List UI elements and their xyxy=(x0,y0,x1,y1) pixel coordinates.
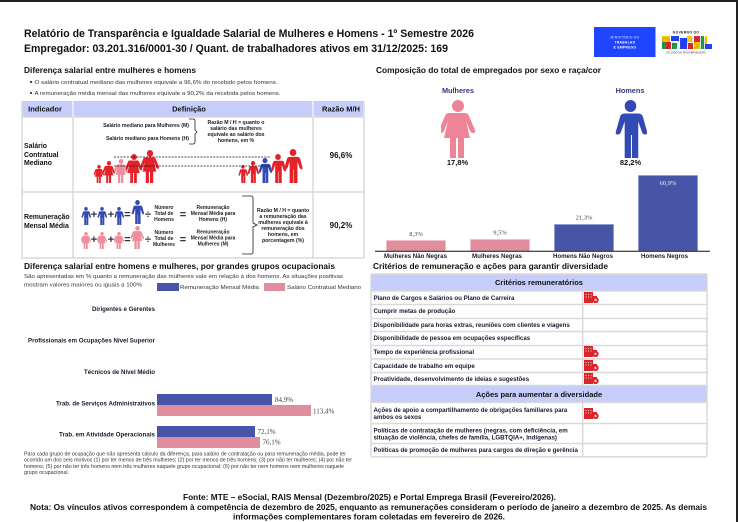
criteria labels xyxy=(374,295,570,383)
logo: Ministério do Trabalho e Emprego: E EMPREGO xyxy=(614,46,636,50)
formula text xyxy=(153,205,235,248)
bullet list: O salário contratual mediano das mulheres equivale a 96,6% do recebido pelos homens. xyxy=(34,80,278,86)
formula operators xyxy=(91,209,186,246)
ratio explanation: a remuneração das xyxy=(259,214,307,220)
footnote: Para cada grupo de ocupação que não apresenta cálculo da diferença, para salário de contratação ou para remuneração média, pode ter xyxy=(24,452,346,458)
heading: grupos ocupacionais: Diferença salarial entre homens e mulheres, por grandes grupos ocupacionais xyxy=(24,261,335,271)
bar values: 76,1% xyxy=(262,438,281,446)
formula text: Número xyxy=(155,230,173,236)
bar chart: sexo e raça xyxy=(375,176,710,260)
formula operators: + xyxy=(91,209,97,221)
actions labels: Ações de apoio a compartilhamento de obrigações familiares para xyxy=(374,407,568,414)
formula text: Remuneração xyxy=(196,205,230,211)
actions labels xyxy=(374,407,579,454)
bullet list xyxy=(30,80,281,97)
footnote: ocorrido um dos seis motivos:(1) por ter menos de três mulheres; (2) por ter menos de três homens; (3) por não ter mulheres; (4) por não ter xyxy=(24,458,352,464)
formula operators: ÷ xyxy=(145,234,151,246)
formula text: Remuneração xyxy=(196,230,230,236)
table header: Razão M/H xyxy=(322,104,360,114)
formula text: Mensal Média para xyxy=(191,236,235,242)
table header: Indicador xyxy=(28,104,62,114)
table header: Definição xyxy=(172,104,206,114)
intro text: São apresentadas em % quanto a remuneração das mulheres vale em relação à dos homens. As situações positivas xyxy=(24,274,343,280)
logo: Ministério do Trabalho e Emprego: TRABALHO xyxy=(615,40,636,44)
composition: homens xyxy=(616,86,647,167)
composition: mulheres: Mulheres xyxy=(442,86,474,95)
bar values: 21,3% xyxy=(576,214,593,222)
formula operators: + xyxy=(91,234,97,246)
row label: remuneração mensal média: Remuneração xyxy=(24,214,70,221)
row definition text: salário: salário das mulheres xyxy=(210,126,262,132)
bar values: 72,1% xyxy=(258,428,276,436)
formula text: Homens (H) xyxy=(199,217,227,223)
ratio explanation xyxy=(257,208,309,244)
row label: salário contratual mediano xyxy=(24,143,59,167)
logo: Ministério do Trabalho e Emprego xyxy=(594,27,656,57)
bar categories: Mulheres Negras xyxy=(472,254,523,260)
row label: remuneração mensal média xyxy=(24,214,70,230)
section header: critérios remuneratórios: Critérios remuneratórios xyxy=(495,278,583,287)
legend xyxy=(157,283,361,291)
logo: Governo do Brasil xyxy=(661,30,712,54)
row label: salário contratual mediano: Salário xyxy=(24,143,47,150)
actions labels: situação de violência, chefes de família, LGBTQIA+, Indígenas) xyxy=(374,434,557,442)
criteria labels: Cumprir metas de produção xyxy=(374,308,456,315)
category labels: Profissionais em Ocupações Nível Superior xyxy=(28,338,156,344)
criteria labels: Proatividade, desenvolvimento de ideias e sugestões xyxy=(374,376,530,383)
actions labels: ambos os sexos xyxy=(374,414,422,421)
table header xyxy=(28,104,360,114)
people: men xyxy=(239,149,303,183)
actions labels: Políticas de contratação de mulheres (negras, com deficiência, em xyxy=(374,428,568,434)
criteria labels: Capacidade de trabalho em equipe xyxy=(374,363,475,370)
category labels xyxy=(28,307,156,438)
footer: fonte e nota: Nota: Os vínculos ativos correspondem à competência de dezembro de 2025, enquanto as remunerações consideram o período de janeiro a dezembro de 2025. As demais xyxy=(30,503,707,512)
bar values: 113,4% xyxy=(313,408,334,416)
bar categories: Homens Negros xyxy=(641,254,689,260)
value: 90,2%: 90,2% xyxy=(330,221,352,230)
title xyxy=(24,28,474,55)
bar categories: Homens Não Negros xyxy=(553,254,614,260)
ratio explanation: porcentagem (%) xyxy=(262,238,304,244)
row definition text: salário: homens, em % xyxy=(218,138,255,144)
formula text: Mulheres (M) xyxy=(198,242,229,248)
bracket xyxy=(189,119,197,144)
section header: ações: Ações para aumentar a diversidade xyxy=(476,390,602,399)
logo: Governo do Brasil: BRASIL xyxy=(661,34,711,53)
intro text xyxy=(24,274,343,288)
formula operators: = xyxy=(124,209,131,221)
bar categories xyxy=(384,254,689,260)
formula operators: = xyxy=(180,234,186,246)
footnote xyxy=(24,452,352,476)
composition: mulheres xyxy=(439,86,475,167)
row label: salário contratual mediano: Contratual xyxy=(24,152,59,159)
bar categories: Mulheres Não Negras xyxy=(384,254,448,260)
category labels: Trab. em Atividade Operacionais xyxy=(59,432,156,438)
formula operators: ÷ xyxy=(145,209,151,221)
footnote: homens; (5) por não ter três homens nem três mulheres naquele grupo ocupacional; (6) por não ter nem homens nem mulheres naquele xyxy=(24,464,344,470)
category labels: Trab. de Serviços Administrativos xyxy=(56,402,156,408)
heading: composição: Composição do total de empregados por sexo e raça/cor xyxy=(376,66,602,75)
actions labels: Políticas de promoção de mulheres para cargos de direção e gerência xyxy=(374,447,579,454)
formula operators: + xyxy=(108,234,114,246)
criteria labels: Disponibilidade de pessoa em ocupações específicas xyxy=(374,335,531,342)
people: women xyxy=(93,150,159,183)
bar values: 8,3% xyxy=(409,231,423,238)
footnote: grupo ocupacional. xyxy=(24,470,69,476)
formula text: Homens xyxy=(154,217,174,223)
heading: diferença salarial: Diferença salarial entre mulheres e homens xyxy=(24,66,196,75)
table: indicador xyxy=(22,101,364,258)
bar values xyxy=(409,180,677,238)
logo: Governo do Brasil: GOVERNO DO xyxy=(673,30,699,34)
title: Relatório de Transparência e Igualdade Salarial de Mulheres e Homens - 1º Semestre 2026 xyxy=(24,28,474,40)
formula text: Mulheres xyxy=(153,242,175,248)
formula operators: = xyxy=(124,234,131,246)
criteria labels: Disponibilidade para horas extras, reuniões com clientes e viagens xyxy=(374,322,570,329)
formula operators: = xyxy=(180,209,186,221)
intro text: mostram valores maiores ou iguais a 100% xyxy=(24,282,142,288)
dashed comparison lines xyxy=(114,157,271,166)
footer: fonte e nota: informações complementares foram coletadas em fevereiro de 2026. xyxy=(233,512,505,522)
legend: Salário Contratual Mediano xyxy=(287,285,361,291)
bars xyxy=(157,394,311,448)
ratio explanation: mulheres equivale à xyxy=(258,220,308,226)
formula: women xyxy=(80,226,144,249)
large bracket xyxy=(242,196,257,254)
row definition text: salário: Razão M / H = quanto o xyxy=(208,120,264,126)
criteria labels: Plano de Cargos e Salários ou Plano de Carreira xyxy=(374,295,515,302)
bar values xyxy=(258,396,334,446)
category labels: Dirigentes e Gerentes xyxy=(92,307,156,313)
formula text: Número xyxy=(155,205,173,211)
formula text: Total de xyxy=(155,236,174,242)
criteria labels: Tempo de experiência profissional xyxy=(374,349,474,356)
composition: homens: 82,2% xyxy=(620,158,641,167)
title: Empregador: 03.201.316/0001-30 / Quant. de trabalhadores ativos em 31/12/2025: 169 xyxy=(24,43,448,55)
bar values: 84,9% xyxy=(275,396,293,404)
formula: men xyxy=(82,200,144,225)
formula text: Total de xyxy=(155,211,174,217)
bar values: 9,5% xyxy=(493,230,507,236)
logo: Ministério do Trabalho e Emprego: MINISTÉRIO DO xyxy=(610,34,640,40)
category labels: Técnicos de Nível Médio xyxy=(84,370,155,376)
row label: remuneração mensal média: Mensal Média xyxy=(24,223,69,230)
heading: critérios: Critérios de remuneração e ações para garantir diversidade xyxy=(373,261,608,271)
row definition text: salário: Salário mediano para Homens (H) xyxy=(106,136,189,142)
bar values: 60,9% xyxy=(660,180,677,187)
bullet list: A remuneração média mensal das mulheres equivale a 90,2% da recebida pelos homens. xyxy=(34,91,281,97)
formula text: Mensal Média para xyxy=(191,211,235,217)
footer: fonte e nota xyxy=(30,493,707,522)
formula operators: + xyxy=(108,209,114,221)
ratio explanation: homens, em xyxy=(268,232,299,238)
ratio explanation: remuneração dos xyxy=(261,226,305,232)
row label: salário contratual mediano: Mediano xyxy=(24,160,52,167)
footer: fonte e nota: Fonte: MTE – eSocial, RAIS Mensal (Dezembro/2025) e Portal Emprega Brasil (Fevereiro/2026). xyxy=(183,493,556,502)
row definition text: salário: Salário mediano para Mulheres (M) xyxy=(103,123,189,129)
logo: Governo do Brasil: DO LADO DO POVO BRASILEIRO xyxy=(666,52,706,54)
composition: mulheres: 17,8% xyxy=(447,158,468,167)
icons: empresa xyxy=(584,292,599,419)
value: 96,6%: 96,6% xyxy=(330,151,352,160)
composition: homens: Homens xyxy=(616,86,644,95)
row definition text: salário xyxy=(103,120,265,144)
table: critérios e ações xyxy=(371,274,707,457)
bar chart: grupos ocupacionais xyxy=(28,307,334,448)
ratio explanation: Razão M / H = quanto xyxy=(257,208,309,214)
legend: Remuneração Mensal Média xyxy=(180,285,260,291)
row definition text: salário: equivale ao salário dos xyxy=(207,132,265,138)
